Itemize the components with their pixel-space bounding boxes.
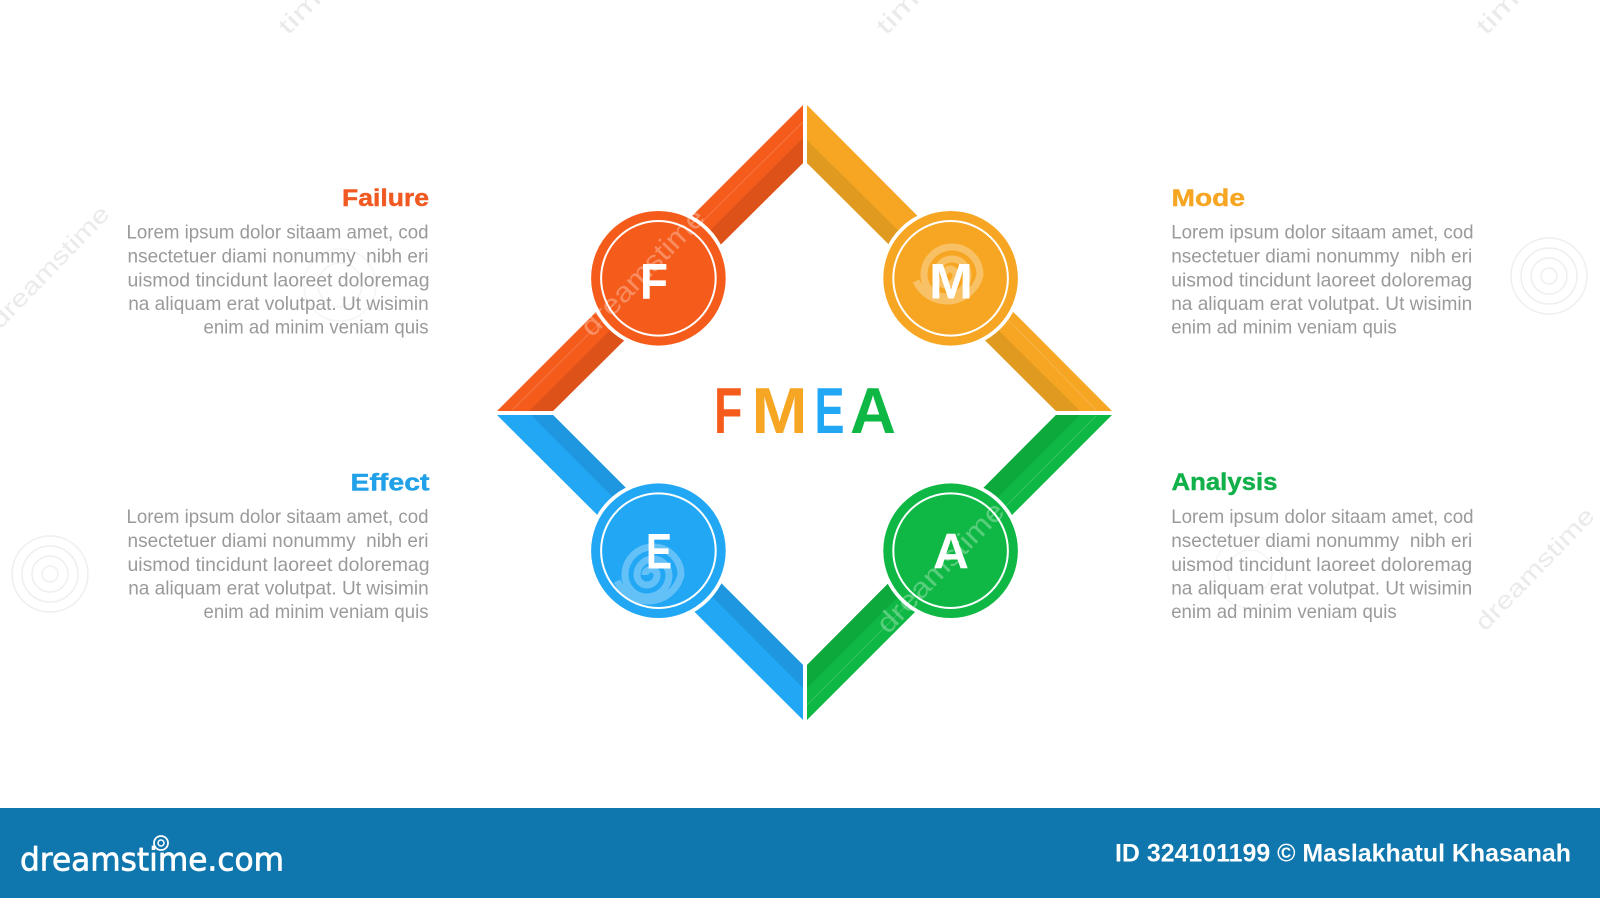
- image id and credit: ID 324101199 © Maslakhatul Khasanah: [1115, 840, 1571, 868]
- body text: Effect: nsectetuer diami nonummy nibh eri: [128, 530, 428, 552]
- center title FMEA: F: [714, 374, 742, 447]
- body text: Analysis: uismod tincidunt laoreet doloremag: [1171, 554, 1472, 576]
- heading: Failure: Failure: [342, 185, 429, 212]
- body text: Mode: na aliquam erat volutpat. Ut wisimin: [1171, 293, 1472, 315]
- body text: Analysis: nsectetuer diami nonummy nibh eri: [1171, 530, 1472, 552]
- body text: Failure: [126, 221, 430, 338]
- panel: Mode: [1171, 185, 1474, 338]
- body text: Effect: [126, 506, 430, 623]
- body text: Effect: Lorem ipsum dolor sitaam amet, cod: [126, 506, 428, 528]
- body text: Analysis: enim ad minim veniam quis: [1171, 601, 1397, 623]
- heading: Effect: Effect: [350, 470, 430, 496]
- circle badge A: [870, 480, 1022, 639]
- body text: Failure: Lorem ipsum dolor sitaam amet, cod: [126, 221, 428, 243]
- body text: Analysis: [1171, 506, 1474, 623]
- body text: Mode: enim ad minim veniam quis: [1171, 316, 1397, 338]
- body text: Mode: Lorem ipsum dolor sitaam amet, cod: [1171, 221, 1474, 243]
- body text: Mode: uismod tincidunt laoreet doloremag: [1171, 269, 1472, 291]
- body text: Failure: nsectetuer diami nonummy nibh eri: [128, 245, 428, 267]
- center title FMEA: E: [814, 374, 844, 447]
- faint watermarks on background: [0, 0, 1600, 636]
- segment: Failure orange: [497, 105, 803, 411]
- circle badge E: [587, 480, 729, 622]
- circle badge M: [880, 207, 1022, 349]
- body text: Effect: enim ad minim veniam quis: [204, 601, 429, 623]
- circle badge F: F: [640, 254, 668, 310]
- panel: Analysis: [1171, 469, 1474, 623]
- logo: dreamstime: dreamstime.com: [20, 840, 284, 878]
- panel: Effect: [126, 470, 430, 623]
- circle badge M: M: [929, 254, 973, 310]
- panel: Failure: [126, 185, 430, 338]
- body text: Mode: [1171, 221, 1474, 338]
- heading: Analysis: Analysis: [1172, 469, 1278, 496]
- center title FMEA: M: [752, 374, 808, 447]
- heading: Mode: Mode: [1172, 185, 1245, 212]
- center title FMEA: A: [850, 374, 896, 447]
- body text: Failure: enim ad minim veniam quis: [204, 316, 429, 338]
- circle badge F: [574, 202, 729, 349]
- body text: Effect: uismod tincidunt laoreet doloremag: [128, 554, 430, 576]
- body text: Failure: na aliquam erat volutpat. Ut wisimin: [128, 293, 429, 315]
- segment: Mode yellow: [807, 105, 1112, 411]
- segment: Analysis green: [807, 415, 1112, 720]
- circle badge A: A: [933, 524, 969, 580]
- center title FMEA: [714, 374, 896, 447]
- body text: Mode: nsectetuer diami nonummy nibh eri: [1171, 245, 1472, 267]
- diamond frame: [497, 105, 1112, 720]
- segment: Effect blue: [497, 415, 803, 720]
- faint watermarks on background: dreamstime: [1470, 502, 1600, 636]
- circle badge A: dreamstime: [870, 495, 1010, 639]
- body text: Analysis: Lorem ipsum dolor sitaam amet, cod: [1171, 506, 1474, 528]
- body text: Effect: na aliquam erat volutpat. Ut wisimin: [128, 577, 429, 599]
- circle badge F: dreamstime: [574, 202, 711, 342]
- body text: Analysis: na aliquam erat volutpat. Ut wisimin: [1171, 577, 1472, 599]
- body text: Failure: uismod tincidunt laoreet doloremag: [128, 269, 430, 291]
- footer banner: [0, 808, 1600, 898]
- circle badge E: E: [646, 524, 672, 580]
